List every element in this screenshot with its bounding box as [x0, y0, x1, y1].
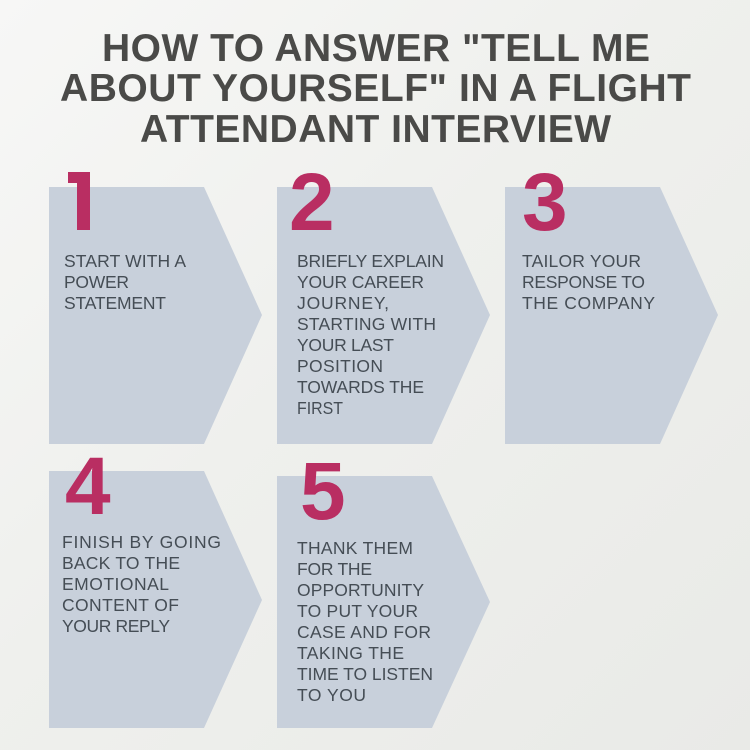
step 1 text: POWER	[64, 272, 129, 292]
step 1 number: 1	[60, 157, 106, 248]
step 2 panel	[277, 157, 490, 444]
step 4 panel	[49, 441, 262, 728]
step 4 text	[62, 532, 221, 636]
step 1 panel	[49, 157, 262, 444]
step 4 text: CONTENT OF	[62, 595, 179, 615]
step 2 text: JOURNEY,	[297, 293, 389, 313]
step 4 number: 4	[65, 441, 111, 532]
step 5 text	[297, 538, 433, 705]
step 2 text: BRIEFLY EXPLAIN	[297, 251, 444, 271]
step 5 text: TO YOU	[297, 685, 366, 705]
step 2 text: YOUR CAREER	[297, 272, 424, 292]
step 2 text	[297, 251, 444, 418]
step 5 text: TIME TO LISTEN	[297, 664, 433, 684]
step 5 text: TAKING THE	[297, 643, 404, 663]
step 4 text: FINISH BY GOING	[62, 532, 221, 552]
step 2 text: POSITION	[297, 356, 383, 376]
step 4 text: EMOTIONAL	[62, 574, 169, 594]
step 3 number: 3	[522, 157, 568, 248]
step 5 text: FOR THE	[297, 559, 372, 579]
step 2 text: YOUR LAST	[297, 335, 394, 355]
step 5 panel	[277, 446, 490, 728]
step 5 text: TO PUT YOUR	[297, 601, 418, 621]
step 5 text: THANK THEM	[297, 538, 413, 558]
step 3 text: RESPONSE TO	[522, 272, 645, 292]
step 5 number: 5	[300, 446, 346, 537]
step 3 panel	[505, 157, 718, 444]
step 2 text: FIRST	[297, 398, 343, 418]
title	[60, 27, 691, 151]
step 1 text: STATEMENT	[64, 293, 166, 313]
step 4 text: BACK TO THE	[62, 553, 180, 573]
title: ATTENDANT INTERVIEW	[140, 108, 611, 151]
title: ABOUT YOURSELF" IN A FLIGHT	[60, 67, 691, 110]
step 1 text	[64, 251, 186, 313]
title: HOW TO ANSWER "TELL ME	[102, 27, 650, 70]
step 3 text	[522, 251, 655, 313]
step 5 text: OPPORTUNITY	[297, 580, 424, 600]
step 2 text: STARTING WITH	[297, 314, 436, 334]
step 5 text: CASE AND FOR	[297, 622, 431, 642]
step 2 number: 2	[289, 157, 335, 248]
step 2 text: TOWARDS THE	[297, 377, 424, 397]
step 4 text: YOUR REPLY	[62, 616, 170, 636]
step 3 text: TAILOR YOUR	[522, 251, 641, 271]
step 1 text: START WITH A	[64, 251, 186, 271]
step 3 text: THE COMPANY	[522, 293, 655, 313]
step 1 number	[68, 172, 90, 230]
